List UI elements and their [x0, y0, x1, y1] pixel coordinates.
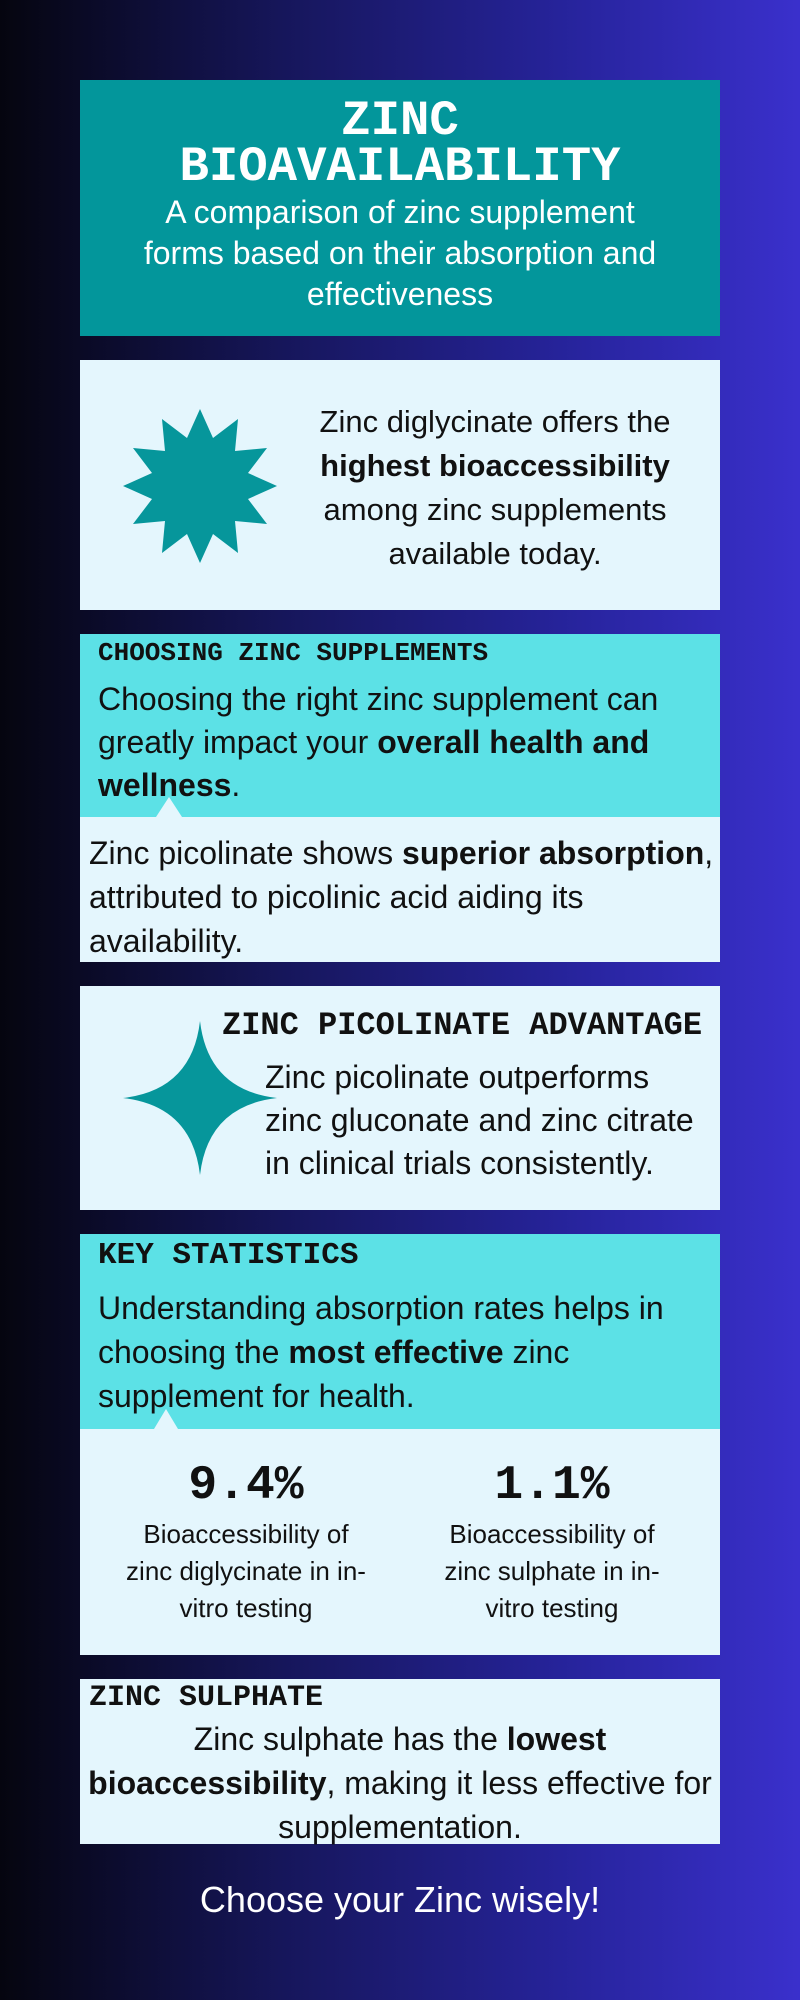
text block: Understanding absorption rates helps in [98, 1290, 664, 1326]
stat: 1.1%: zinc sulphate in in- [444, 1556, 660, 1586]
panel: zinc sulphate [80, 1679, 720, 1844]
stat: 1.1%: 1.1% [494, 1459, 610, 1513]
heading: CHOOSING ZINC SUPPLEMENTS [98, 638, 488, 668]
subtitle [144, 194, 656, 312]
text block: supplement for health. [98, 1378, 415, 1414]
text block: zinc gluconate and zinc citrate [265, 1102, 694, 1138]
icon: 4-point star [123, 1021, 277, 1175]
text block [98, 681, 658, 803]
subtitle: forms based on their absorption and [144, 235, 656, 271]
text block: Zinc diglycinate offers the [320, 404, 670, 439]
text block: bioaccessibility, making it less effective for [88, 1765, 712, 1801]
icon: 12-point star [123, 409, 277, 563]
heading: ZINC PICOLINATE ADVANTAGE [222, 1007, 702, 1044]
stat: 1.1% [444, 1459, 660, 1623]
pointer triangle [156, 797, 182, 817]
heading: KEY STATISTICS [98, 1238, 358, 1273]
subtitle: effectiveness [307, 276, 493, 312]
pointer triangle [154, 1409, 178, 1429]
text block: Zinc sulphate has the lowest [194, 1721, 606, 1757]
title heading [179, 93, 621, 195]
panel: key statistics [80, 1234, 720, 1655]
text block [88, 1721, 712, 1845]
teal header area [80, 634, 720, 817]
stat: 1.1%: vitro testing [486, 1593, 618, 1623]
text block [98, 1290, 664, 1414]
stat: 9.4%: 9.4% [188, 1459, 304, 1513]
panel: choosing zinc supplements [80, 634, 720, 962]
text block [320, 404, 670, 571]
text block: supplementation. [278, 1809, 522, 1845]
text block: choosing the most effective zinc [98, 1334, 569, 1370]
heading: ZINC SULPHATE [89, 1681, 323, 1715]
panel: zinc diglycinate [80, 360, 720, 610]
text block: picolinate: Zinc picolinate shows superior absorption, [89, 835, 713, 871]
footer callout: Choose your Zinc wisely! [200, 1879, 600, 1920]
text block [265, 1059, 694, 1181]
text block: greatly impact your overall health and [98, 724, 649, 760]
text block: Choosing the right zinc supplement can [98, 681, 658, 717]
text block: among zinc supplements [324, 492, 666, 527]
text block: wellness. [98, 767, 240, 803]
text block: Zinc picolinate outperforms [265, 1059, 649, 1095]
stat: 9.4%: zinc diglycinate in in- [126, 1556, 366, 1586]
stat: 9.4%: vitro testing [180, 1593, 312, 1623]
text block: highest bioaccessibility [320, 448, 670, 483]
text block: available today. [388, 536, 602, 571]
stat: 9.4%: Bioaccessibility of [143, 1519, 349, 1549]
subtitle: A comparison of zinc supplement [165, 194, 635, 230]
text block: in clinical trials consistently. [265, 1145, 654, 1181]
text block: picolinate: attributed to picolinic acid aiding its [89, 879, 584, 915]
stat: 1.1%: Bioaccessibility of [449, 1519, 655, 1549]
title panel [80, 80, 720, 336]
panel: zinc picolinate advantage [80, 986, 720, 1210]
stat: 9.4% [126, 1459, 366, 1623]
text block: picolinate: availability. [89, 923, 243, 959]
title heading: BIOAVAILABILITY [179, 139, 621, 195]
text block: picolinate [89, 835, 713, 959]
teal header area [80, 1234, 720, 1429]
title heading: ZINC [341, 93, 459, 149]
